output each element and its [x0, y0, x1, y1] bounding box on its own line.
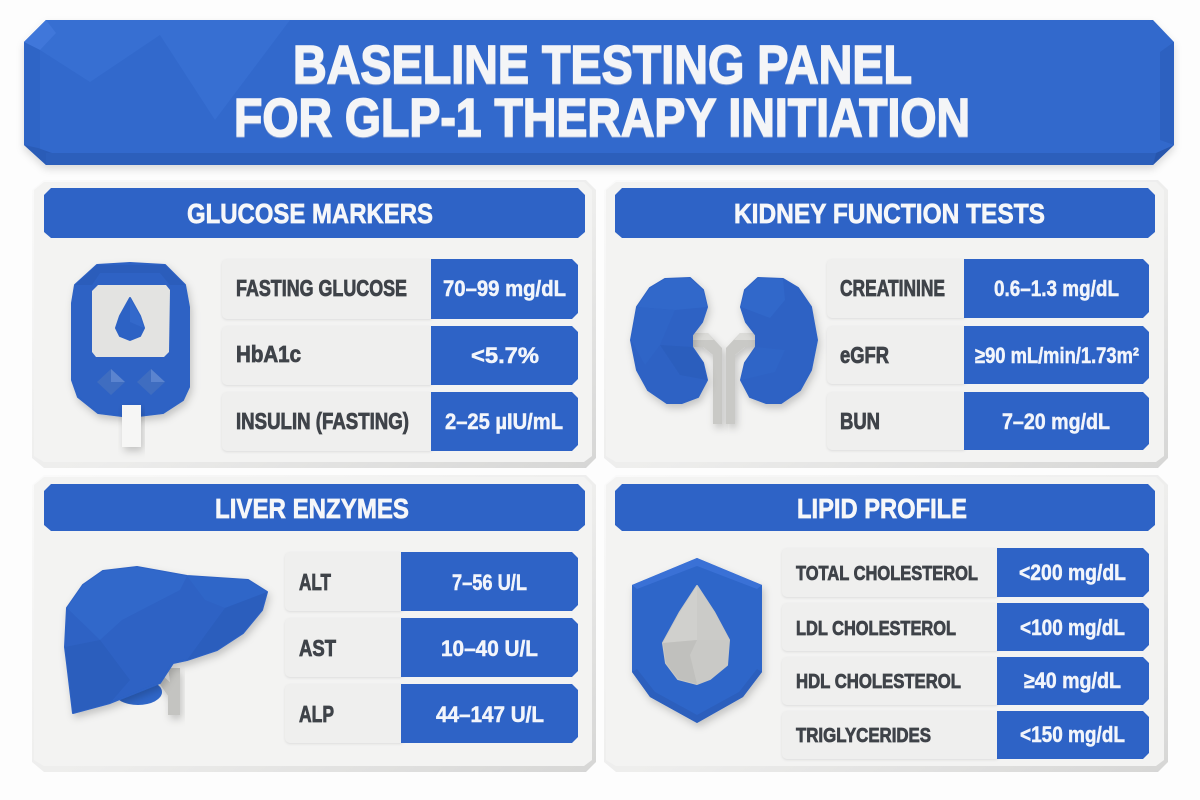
lipid header — [615, 484, 1155, 531]
kidney row: egfr: ≥90 mL/min/1.73m² — [975, 343, 1139, 368]
kidney row: egfr: eGFR — [840, 342, 889, 368]
kidney row: creatinine — [827, 259, 1149, 318]
glucose row: fasting glucose: FASTING GLUCOSE — [236, 275, 407, 301]
glucose header — [44, 188, 585, 238]
lipid row: ldl cholesterol — [782, 603, 1149, 651]
liver row: alt: ALT — [299, 569, 331, 595]
lipid row: total cholesterol — [782, 548, 1149, 597]
icon: kidneys — [631, 278, 817, 424]
liver row: alp: 44–147 U/L — [436, 702, 544, 727]
glucose row: insulin: INSULIN (FASTING) — [236, 408, 409, 434]
title text — [234, 35, 970, 148]
liver header: LIVER ENZYMES — [215, 493, 409, 524]
icon: liver — [65, 567, 267, 715]
title text: BASELINE TESTING PANEL — [293, 35, 912, 95]
liver row: ast — [285, 618, 578, 677]
liver row: alt: 7–56 U/L — [452, 570, 527, 595]
lipid row: hdl cholesterol — [782, 657, 1149, 705]
title banner — [24, 20, 1174, 165]
glucose row: fasting glucose — [222, 259, 578, 319]
panel: glucose markers — [32, 180, 596, 468]
lipid row: triglycerides: <150 mg/dL — [1020, 722, 1125, 747]
lipid row: total cholesterol: TOTAL CHOLESTEROL — [796, 562, 978, 585]
liver row: ast: 10–40 U/L — [441, 636, 538, 661]
glucose header: GLUCOSE MARKERS — [187, 198, 433, 229]
liver header — [44, 484, 585, 531]
icon: glucose meter — [72, 263, 189, 447]
title text: FOR GLP-1 THERAPY INITIATION — [234, 88, 970, 148]
icon: shield with drop — [632, 558, 762, 723]
kidney row: bun: BUN — [840, 408, 880, 434]
kidney row: creatinine: 0.6–1.3 mg/dL — [994, 276, 1119, 301]
glucose row: hba1c: HbA1c — [236, 341, 301, 367]
glucose row: insulin — [222, 392, 578, 451]
glucose row: hba1c — [222, 326, 578, 385]
lipid row: hdl cholesterol: ≥40 mg/dL — [1024, 668, 1121, 693]
liver row: ast: AST — [299, 635, 336, 661]
panel: lipid profile — [604, 475, 1168, 772]
liver row: alt — [285, 552, 578, 611]
lipid row: triglycerides — [782, 711, 1149, 759]
lipid row: ldl cholesterol: <100 mg/dL — [1020, 615, 1125, 640]
kidney row: bun — [827, 392, 1149, 450]
kidney header — [615, 188, 1155, 238]
glucose row: hba1c: <5.7% — [471, 343, 539, 368]
panel: kidney function tests — [604, 180, 1168, 468]
liver row: alp — [285, 684, 578, 743]
glucose row: insulin: 2–25 µIU/mL — [445, 409, 563, 434]
panel: liver enzymes — [32, 475, 596, 772]
kidney row: egfr — [827, 326, 1149, 384]
lipid row: ldl cholesterol: LDL CHOLESTEROL — [796, 617, 956, 640]
lipid row: hdl cholesterol: HDL CHOLESTEROL — [796, 670, 961, 693]
lipid header: LIPID PROFILE — [797, 493, 967, 524]
kidney row: creatinine: CREATININE — [840, 275, 945, 301]
glucose row: fasting glucose: 70–99 mg/dL — [443, 276, 566, 301]
lipid row: total cholesterol: <200 mg/dL — [1019, 560, 1126, 585]
kidney header: KIDNEY FUNCTION TESTS — [734, 198, 1045, 229]
lipid row: triglycerides: TRIGLYCERIDES — [796, 724, 931, 747]
liver row: alp: ALP — [299, 701, 334, 727]
kidney row: bun: 7–20 mg/dL — [1002, 409, 1110, 434]
